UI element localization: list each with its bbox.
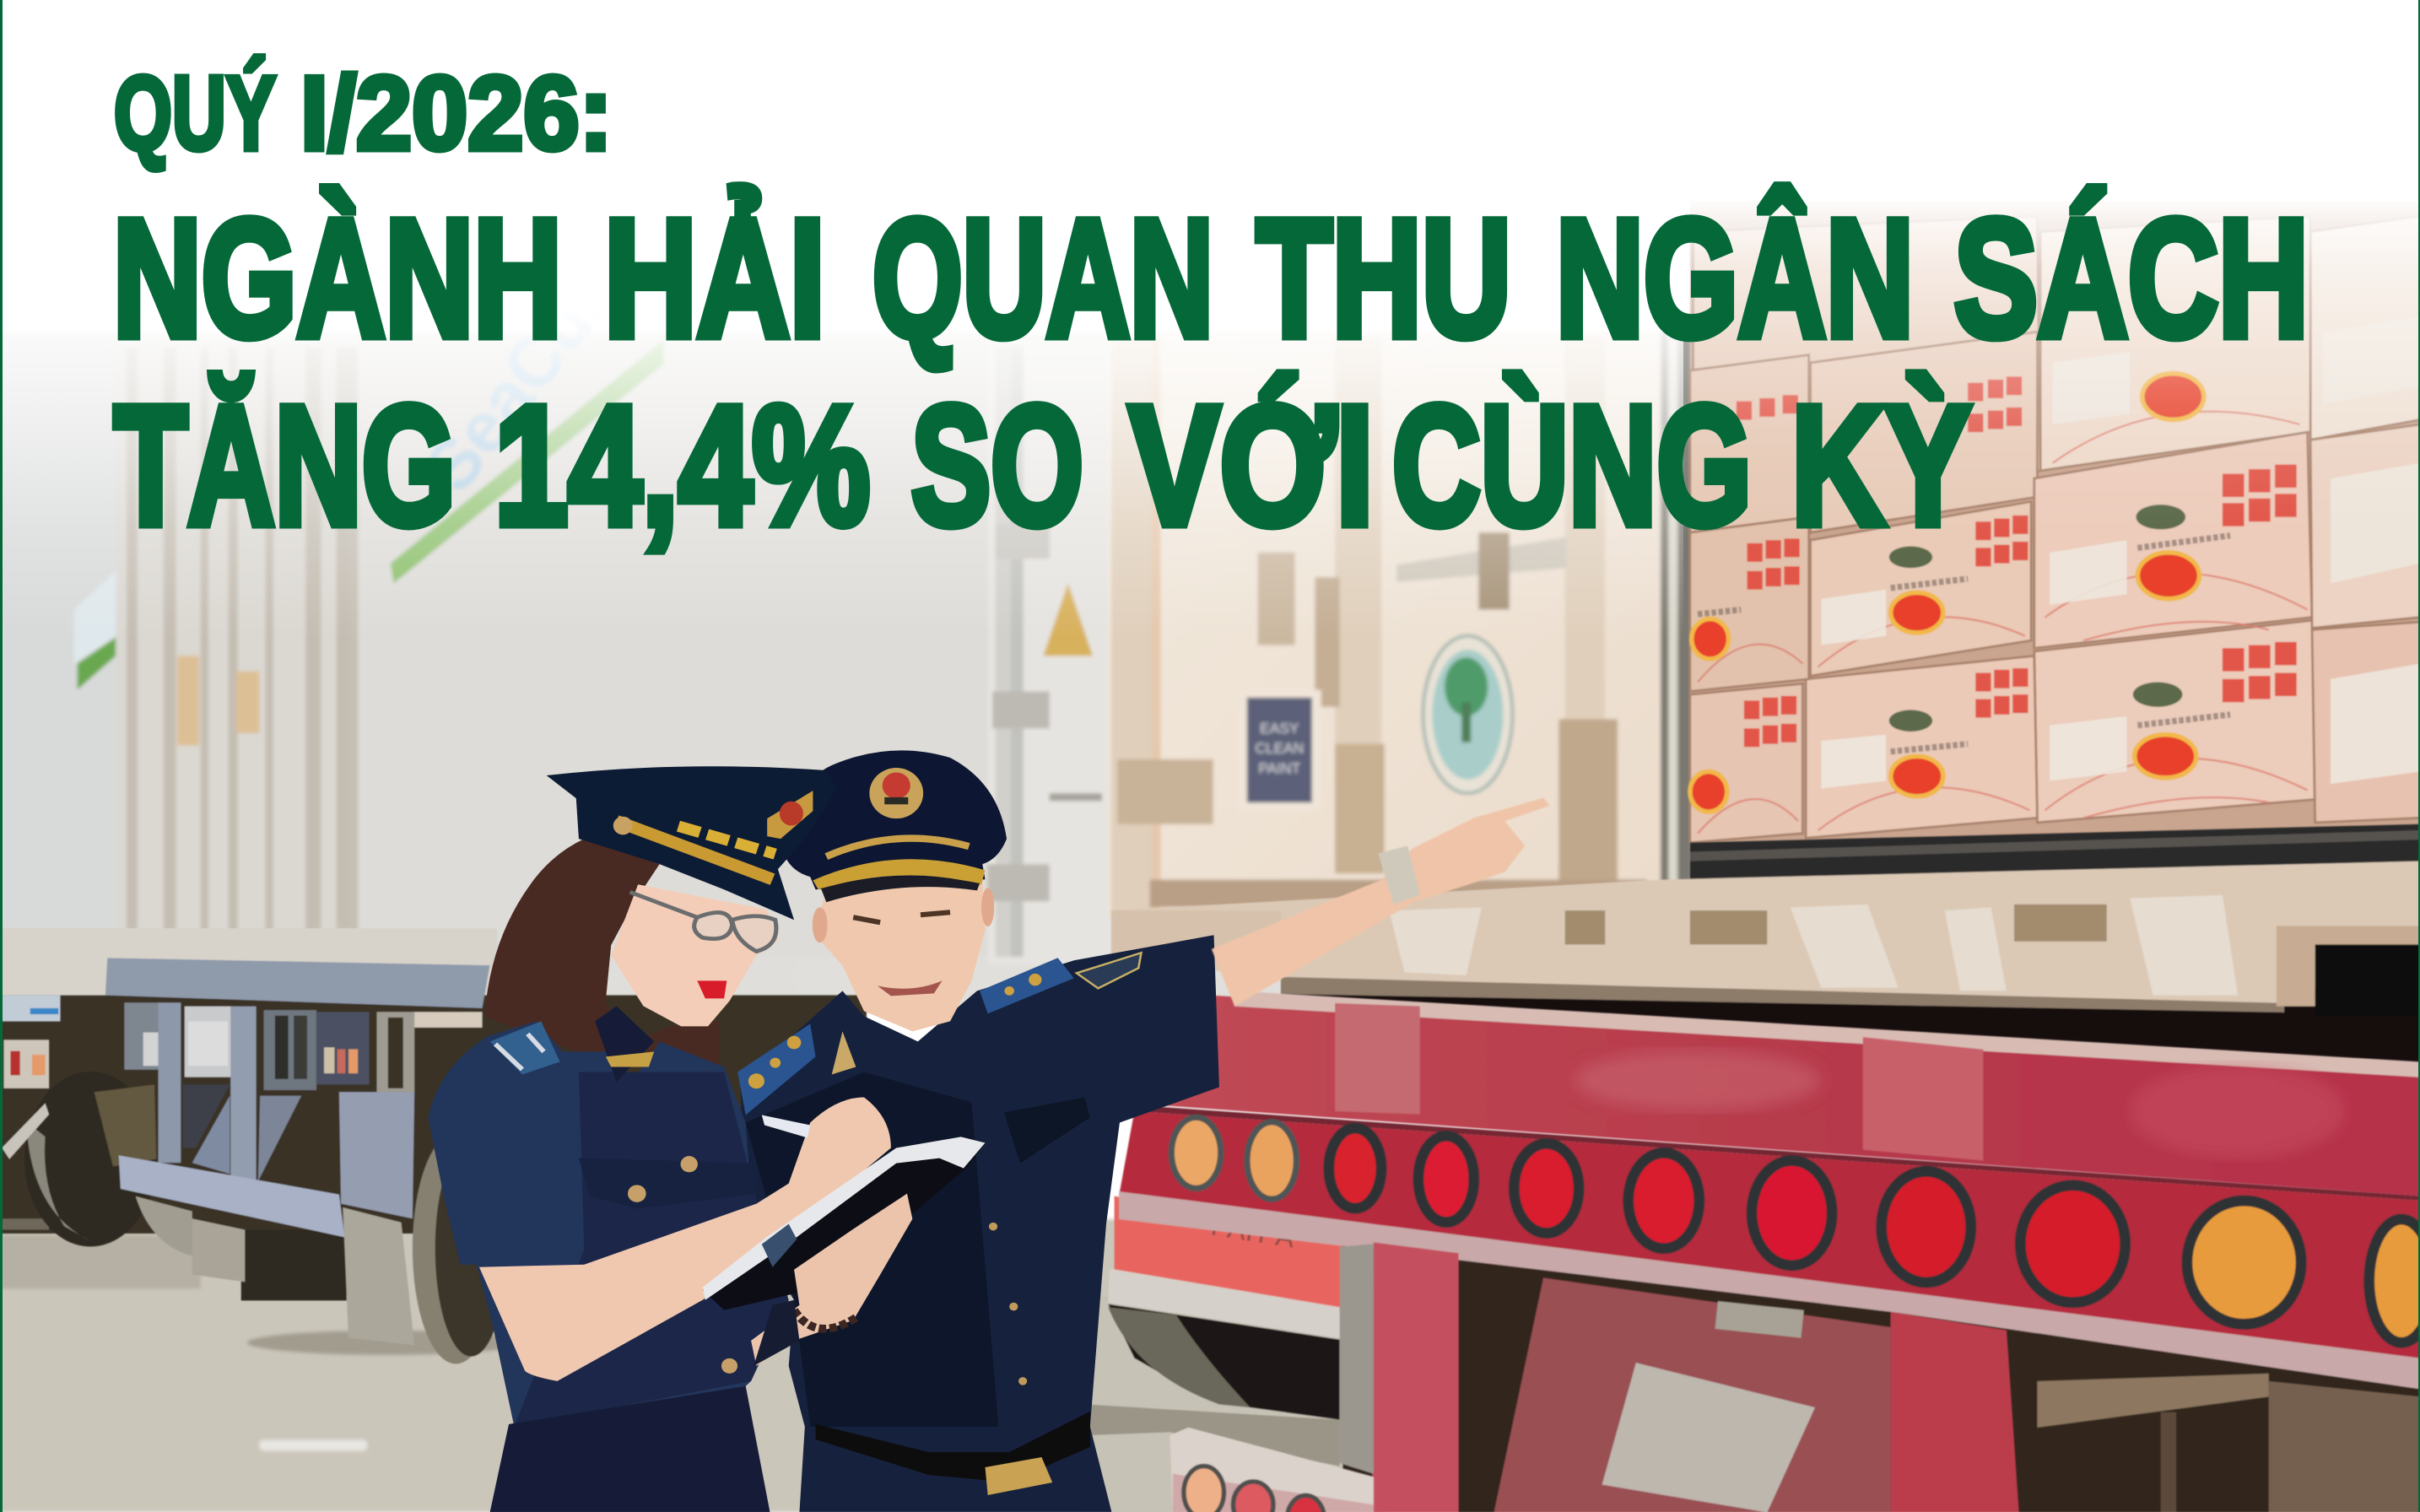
grey lower lip	[1119, 1191, 2420, 1389]
title line 3: TĂNG 14,4% SO VỚI CÙNG KỲ: 14,4%	[494, 370, 870, 560]
title line 2: NGÀNH HẢI QUAN THU NGÂN SÁCH: NGÀNH	[113, 185, 562, 371]
pointing arm and watch	[1212, 798, 1549, 1007]
title	[113, 56, 2309, 560]
tool boxes	[124, 1002, 165, 1070]
red trailer beam	[1080, 991, 2420, 1512]
title line 3: TĂNG 14,4% SO VỚI CÙNG KỲ: CÙNG	[1392, 370, 1752, 560]
left trailer chassis and wheels	[0, 928, 867, 1364]
white fade over top of photo	[0, 0, 2420, 641]
title line 2: NGÀNH HẢI QUAN THU NGÂN SÁCH: HẢI	[604, 185, 825, 371]
title line 2: NGÀNH HẢI QUAN THU NGÂN SÁCH: NGÂN	[1556, 185, 1914, 371]
frame	[159, 1002, 181, 1163]
title line 3: TĂNG 14,4% SO VỚI CÙNG KỲ: TĂNG	[114, 370, 456, 560]
title line 1: QUÝ I/2026:	[114, 56, 613, 172]
box windows	[1889, 505, 2185, 732]
cardboard boxes	[1690, 201, 2420, 849]
title line 3: TĂNG 14,4% SO VỚI CÙNG KỲ: SO	[911, 370, 1083, 560]
right container door	[1108, 332, 1692, 915]
lamps	[1171, 1117, 2420, 1342]
title line 3: TĂNG 14,4% SO VỚI CÙNG KỲ	[114, 370, 1971, 560]
title line 2: NGÀNH HẢI QUAN THU NGÂN SÁCH: QUAN	[872, 185, 1213, 371]
title line 3: TĂNG 14,4% SO VỚI CÙNG KỲ: KỲ	[1791, 370, 1971, 560]
supports and ramp	[1494, 1277, 1891, 1512]
man's cap badge	[869, 768, 923, 818]
under-trailer red panel	[1115, 1196, 1342, 1312]
woman's cap badge	[767, 791, 813, 839]
ground	[0, 1219, 1389, 1512]
ground and rear wheel	[1080, 1296, 1342, 1512]
title line 1: QUÝ I/2026:: I/2026:	[300, 56, 613, 172]
container plate: easy clean paint: CLEAN	[1255, 740, 1304, 757]
officer: woman	[428, 766, 837, 1512]
lamp strip	[1119, 1111, 2420, 1366]
red trailer beam: PAIT A	[1209, 1210, 1297, 1254]
box printed number grids	[1737, 376, 2297, 747]
container plate: easy clean paint	[1238, 690, 1321, 810]
title line 3: TĂNG 14,4% SO VỚI CÙNG KỲ: VỚI	[1129, 370, 1374, 560]
container plate: easy clean paint: EASY	[1260, 720, 1299, 737]
box print lines	[1698, 412, 2308, 834]
lower bar and posts	[192, 1218, 245, 1282]
small lower lamp bar	[1169, 1428, 1374, 1512]
box brand logos	[1690, 374, 2204, 812]
truck floor rail and container sill	[1111, 824, 2420, 1080]
title line 2: NGÀNH HẢI QUAN THU NGÂN SÁCH: SÁCH	[1954, 185, 2309, 371]
container sticker: tree emblem	[1423, 636, 1513, 793]
officer: man	[737, 750, 1219, 1512]
beam top section	[1134, 996, 2420, 1196]
title line 2: NGÀNH HẢI QUAN THU NGÂN SÁCH	[113, 185, 2309, 371]
chassis beam	[105, 958, 489, 1008]
wheels	[24, 1072, 156, 1246]
container logo: SeaCube	[409, 218, 659, 506]
title line 1: QUÝ I/2026:: QUÝ	[114, 56, 276, 172]
lower structure behind beam	[1340, 1219, 2420, 1512]
left containers	[0, 218, 2420, 1011]
officers	[428, 750, 1219, 1512]
title line 2: NGÀNH HẢI QUAN THU NGÂN SÁCH: THU	[1256, 185, 1511, 371]
notebook and arms	[479, 1097, 985, 1381]
center container	[988, 348, 1111, 964]
container plate: easy clean paint: PAINT	[1258, 759, 1301, 776]
box labels	[1821, 316, 2420, 789]
